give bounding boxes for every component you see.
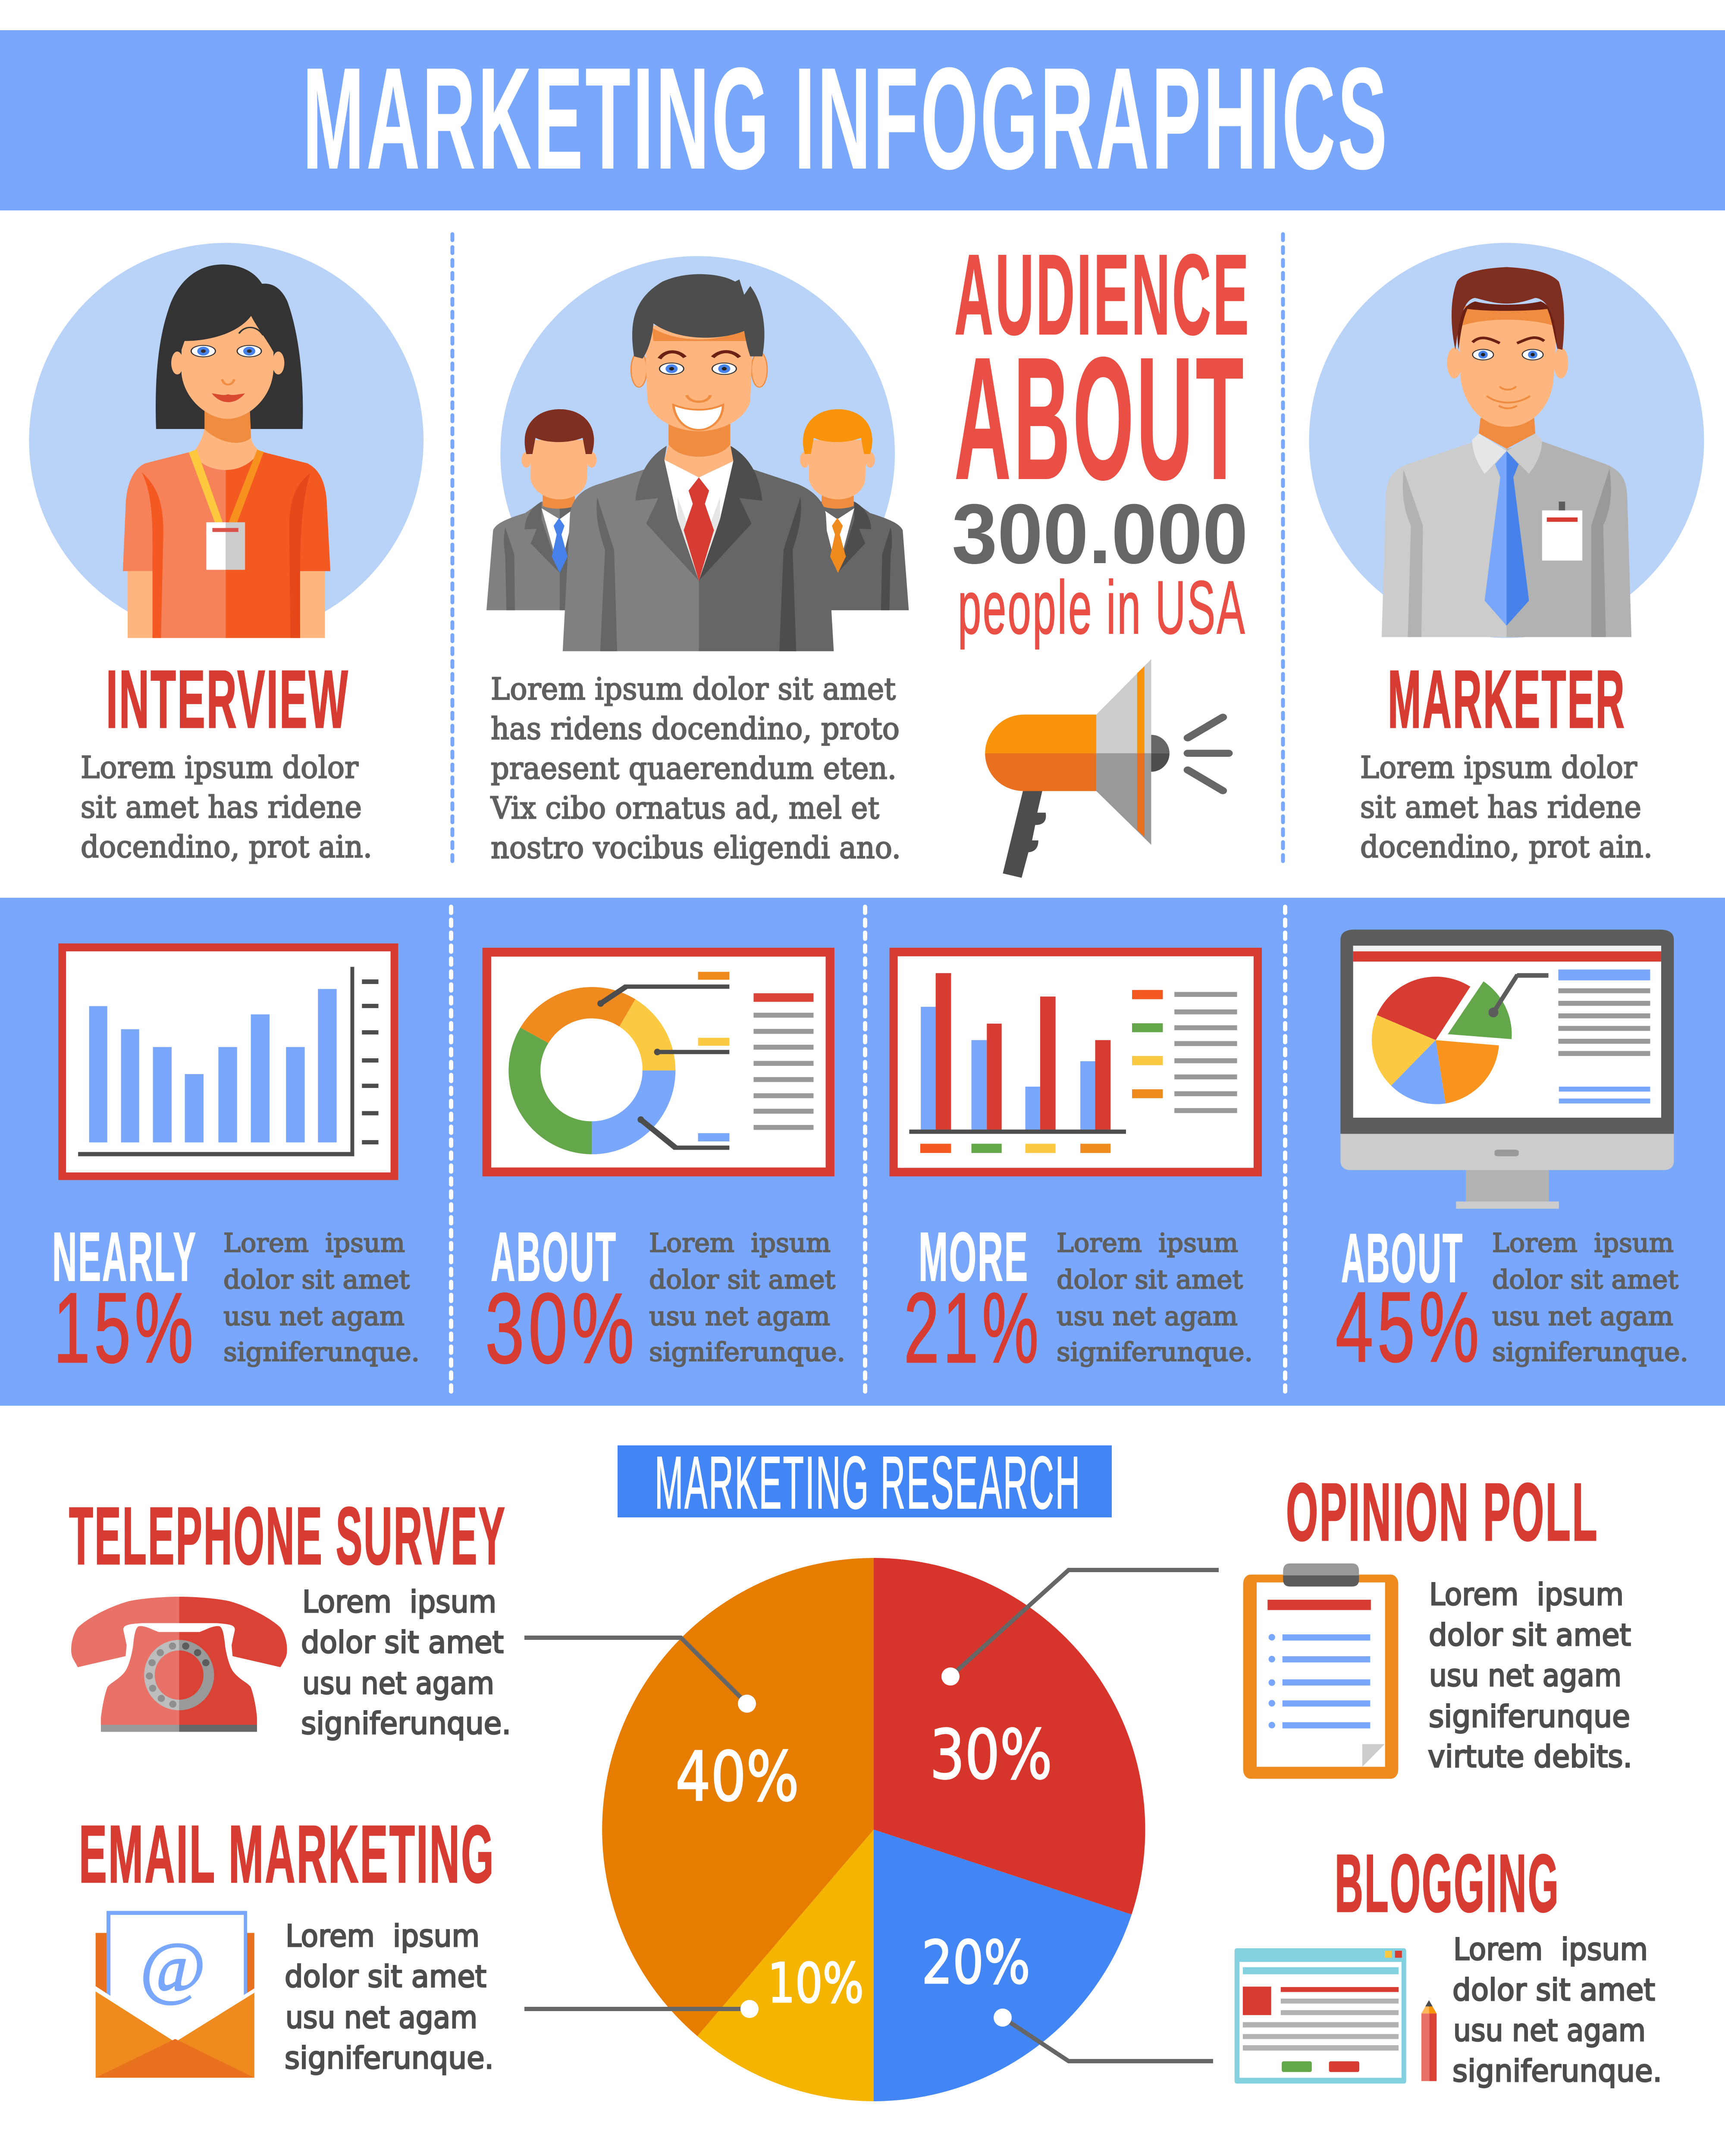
- text block: stat 3: [1057, 1228, 1253, 1367]
- text block: telephone survey: dolor sit amet: [301, 1625, 504, 1660]
- text block: stat 1: dolor sit amet: [223, 1265, 410, 1295]
- text block: interview: sit amet has ridene: [81, 790, 362, 825]
- label: 10%: 10%: [768, 1951, 864, 2015]
- divider: blue dotted left: [450, 234, 455, 865]
- text block: marketer: sit amet has ridene: [1360, 790, 1641, 825]
- text block: stat 1: Lorem ipsum: [223, 1228, 405, 1258]
- text block: opinion poll: usu net agam: [1429, 1658, 1622, 1693]
- panel: blogging: [1235, 1838, 1662, 2089]
- panel: marketer: [1309, 243, 1704, 865]
- header banner: [0, 30, 1725, 210]
- icon: envelope: [96, 1911, 254, 2078]
- small right man: [800, 409, 909, 610]
- icon: browser window: [1235, 1948, 1406, 2084]
- text block: team: Lorem ipsum dolor sit amet: [491, 671, 896, 707]
- icon: pencil: [1421, 2000, 1436, 2081]
- text: TELEPHONE SURVEY: [69, 1491, 506, 1582]
- text block: opinion poll: dolor sit amet: [1429, 1617, 1631, 1653]
- text block: blogging: [1452, 1932, 1662, 2089]
- text block: stat 3: Lorem ipsum: [1057, 1228, 1238, 1258]
- stat: nearly 15%: [52, 1218, 197, 1383]
- icon: telephone: [71, 1597, 287, 1732]
- panel: interview: [29, 243, 423, 865]
- illustration: woman with badge: [29, 243, 423, 638]
- text block: email marketing: signiferunque.: [285, 2040, 494, 2076]
- small left man: [486, 409, 596, 610]
- panel: statistics band: NEARLY: [52, 1218, 197, 1296]
- text block: telephone survey: Lorem ipsum: [302, 1584, 496, 1620]
- illustration: marketer man: [1309, 243, 1704, 638]
- text block: stat 2: usu net agam: [649, 1301, 830, 1332]
- text block: interview: docendino, prot ain.: [81, 829, 372, 865]
- text block: email marketing: usu net agam: [285, 2000, 477, 2035]
- heading: interview: INTERVIEW: [106, 654, 349, 745]
- text block: email marketing: [285, 1918, 494, 2076]
- panel: opinion poll: [1243, 1467, 1632, 1779]
- text block: blogging: usu net agam: [1453, 2013, 1646, 2048]
- number: 300.000: 300.000: [952, 486, 1248, 581]
- stat: about 30%: ABOUT: [491, 1218, 617, 1296]
- text block: stat 4: [1492, 1228, 1688, 1367]
- text block: stat 2: Lorem ipsum: [649, 1228, 831, 1258]
- stat: more 21%: [904, 1218, 1042, 1383]
- text block: team: has ridens docendino, proto: [491, 711, 900, 746]
- text: AUDIENCE: [954, 231, 1251, 359]
- text block: marketer: docendino, prot ain.: [1360, 829, 1653, 865]
- text block: stat 4: dolor sit amet: [1492, 1265, 1678, 1295]
- text block: stat 1: usu net agam: [223, 1301, 405, 1332]
- panel: audience: [952, 231, 1251, 878]
- text block: team: [490, 671, 901, 865]
- text block: stat 3: usu net agam: [1057, 1301, 1238, 1332]
- divider: blue dotted right: [1281, 234, 1285, 865]
- text block: blogging: dolor sit amet: [1452, 1972, 1655, 2008]
- text block: team: Vix cibo ornatus ad, mel et: [490, 790, 879, 826]
- text block: email marketing: dolor sit amet: [285, 1959, 486, 1994]
- text block: stat 1: signiferunque.: [223, 1337, 420, 1367]
- chart: grouped bars board: [889, 948, 1262, 1176]
- panel: team: [486, 256, 909, 865]
- text block: opinion poll: [1428, 1577, 1632, 1774]
- stat: about 45%: ABOUT: [1341, 1219, 1464, 1297]
- text block: interview: Lorem ipsum dolor: [81, 750, 359, 785]
- chart: donut chart board: [483, 948, 834, 1176]
- icon: monitor with pie chart: [1340, 930, 1674, 1209]
- panel: telephone survey: [69, 1491, 511, 1741]
- stat: more 21%: 21%: [904, 1272, 1042, 1383]
- text block: telephone survey: usu net agam: [302, 1666, 494, 1701]
- main man: [563, 274, 834, 651]
- stat: more 21%: MORE: [919, 1218, 1029, 1296]
- text block: stat 2: signiferunque.: [649, 1337, 845, 1367]
- text block: stat 2: [649, 1228, 845, 1367]
- icon: megaphone: [985, 659, 1229, 878]
- heading: email marketing: EMAIL MARKETING: [79, 1809, 495, 1900]
- stat: about 45%: [1336, 1219, 1483, 1382]
- text block: blogging: Lorem ipsum: [1453, 1932, 1648, 1967]
- text block: stat 1: [223, 1228, 420, 1367]
- text block: team: praesent quaerendum eten.: [491, 751, 897, 786]
- text block: email marketing: Lorem ipsum: [285, 1918, 480, 1954]
- text block: opinion poll: Lorem ipsum: [1429, 1577, 1624, 1612]
- label: 40%: 40%: [675, 1737, 799, 1817]
- stat: about 30%: [485, 1218, 638, 1384]
- illustration: team of three businessmen: [486, 256, 909, 651]
- text block: opinion poll: virtute debits.: [1428, 1739, 1632, 1774]
- text block: stat 2: dolor sit amet: [649, 1265, 835, 1295]
- stat: about 45%: 45%: [1336, 1271, 1483, 1382]
- stat: nearly 15%: 15%: [53, 1272, 197, 1383]
- text: MARKETING RESEARCH: [655, 1441, 1081, 1524]
- banner: marketing research: [618, 1441, 1112, 1524]
- stat: about 30%: 30%: [485, 1272, 638, 1384]
- text block: stat 3: dolor sit amet: [1057, 1265, 1243, 1295]
- text block: telephone survey: signiferunque.: [301, 1706, 511, 1741]
- text block: stat 4: Lorem ipsum: [1492, 1228, 1674, 1258]
- text: people in USA: people in USA: [958, 566, 1246, 650]
- text block: opinion poll: signiferunque: [1429, 1699, 1630, 1734]
- icon: envelope: @: [140, 1928, 205, 2007]
- chart: marketing research pie: [524, 1558, 1219, 2101]
- panel: statistics band: [0, 898, 1725, 1406]
- text block: blogging: signiferunque.: [1452, 2053, 1662, 2089]
- icon: clipboard: [1243, 1564, 1398, 1779]
- chart: bar chart board: [58, 943, 398, 1180]
- label: 30%: 30%: [930, 1715, 1052, 1795]
- text block: stat 3: signiferunque.: [1057, 1337, 1253, 1367]
- text block: stat 4: signiferunque.: [1492, 1337, 1688, 1367]
- panel: email marketing: [79, 1809, 495, 2078]
- text block: telephone survey: [301, 1584, 511, 1741]
- text block: marketer: Lorem ipsum dolor: [1360, 750, 1637, 785]
- text block: marketer: [1360, 750, 1653, 865]
- pie leaders: [524, 1570, 1219, 2061]
- text block: stat 4: usu net agam: [1492, 1301, 1673, 1332]
- text block: interview: [81, 750, 372, 865]
- label: 20%: 20%: [922, 1928, 1030, 1997]
- text block: team: nostro vocibus eligendi ano.: [491, 830, 901, 865]
- text: ABOUT: [954, 321, 1246, 516]
